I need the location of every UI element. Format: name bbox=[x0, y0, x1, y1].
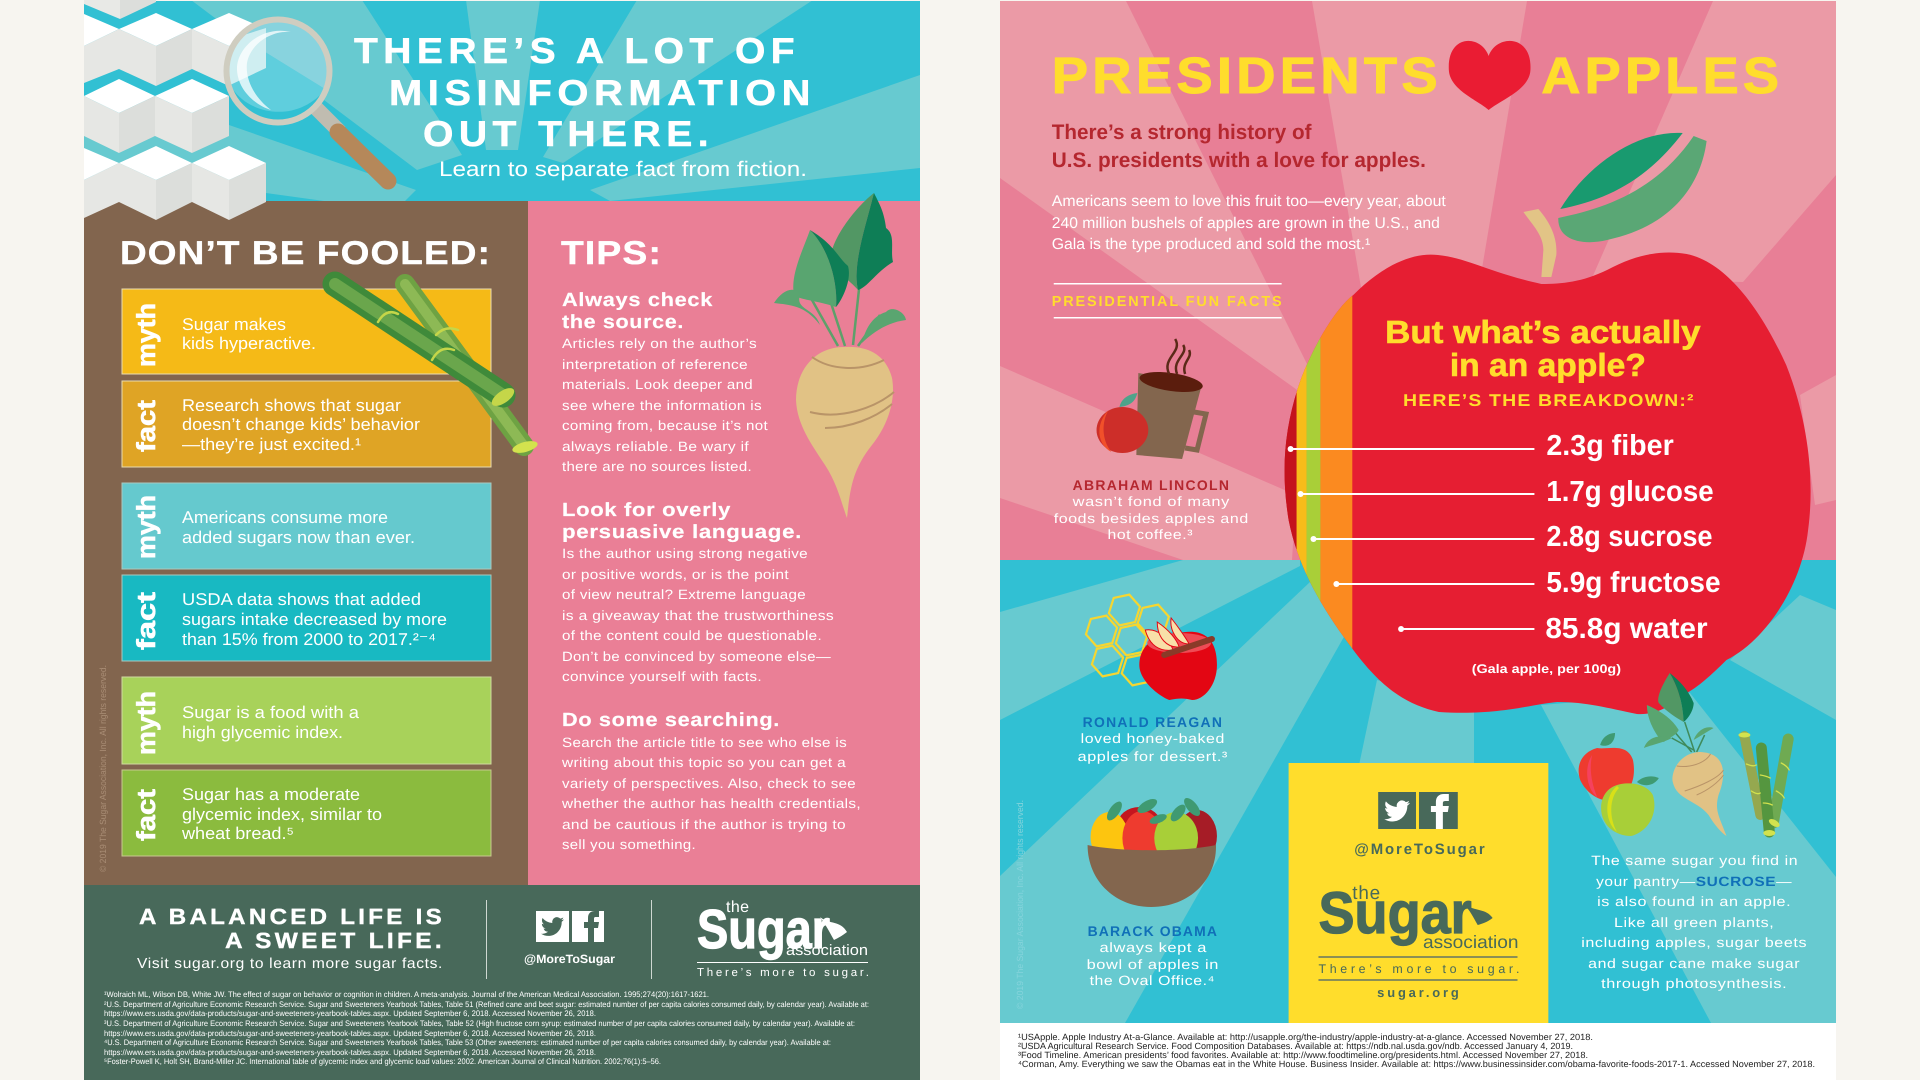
tip: persuasive language: Is the author using strong negative bbox=[562, 546, 808, 561]
balanced life message bbox=[137, 904, 445, 972]
myth card: added sugars: Americans consume more bbox=[182, 508, 388, 527]
heading: what's in an apple: HERE’S THE BREAKDOWN:² bbox=[1403, 391, 1695, 410]
references: ¹Wolraich ML, Wilson DB, White JW. The effect of sugar on behavior or cognition in children. A meta-analysis. Journal of the American Medical Association. 1995;274(20):1617-1621. bbox=[104, 990, 709, 999]
breakdown note: (Gala apple, per 100g) bbox=[1472, 662, 1621, 676]
references: https://www.ers.usda.gov/data-products/sugar-and-sweeteners-yearbook-tables.aspx. Updated September 6, 2018. Accessed November 26, 2018. bbox=[104, 1029, 596, 1038]
tip: do some searching: Search the article title to see who else is bbox=[562, 735, 847, 750]
references bbox=[1018, 1032, 1815, 1069]
cane bbox=[1738, 732, 1789, 836]
breakdown: water bbox=[1398, 613, 1708, 645]
references: https://www.ers.usda.gov/data-products/sugar-and-sweeteners-yearbook-tables.aspx. Updated September 6, 2018. Accessed November 26, 2018. bbox=[104, 1009, 596, 1018]
references: ⁴Corman, Amy. Everything we saw the Obamas eat in the White House. Business Insider. Available at: https://www.businessinsider.com/obama-favorite-foods-2017-1. Accessed November 27, 2018. bbox=[1018, 1059, 1815, 1069]
tip: persuasive language: or positive words, or is the point bbox=[562, 567, 789, 582]
tip: check the source: see where the information is bbox=[562, 398, 762, 413]
heading: what's in an apple bbox=[1385, 314, 1701, 410]
references: ³U.S. Department of Agriculture Economic Research Service. Sugar and Sweeteners Yearbook Tables, Table 52 (High fructose corn syrup: estimated number of per capita calories consumed daily, by calendar year). Available at: bbox=[104, 1019, 855, 1028]
panel: don't be fooled bbox=[84, 201, 528, 885]
tip: check the source: coming from, because it’s not bbox=[562, 418, 768, 433]
heading: misinformation: OUT THERE. bbox=[423, 113, 714, 154]
heading: don't be fooled: DON’T BE FOOLED: bbox=[120, 234, 491, 271]
apple nutrient bands bbox=[1279, 240, 1816, 730]
panel: tips bbox=[528, 201, 920, 885]
fact card: moderate glycemic index: wheat bread.⁵ bbox=[181, 824, 294, 843]
apples bbox=[1579, 733, 1659, 836]
references: ²U.S. Department of Agriculture Economic Research Service. Sugar and Sweeteners Yearbook Tables, Table 51 (Refined cane and beet sugar: estimated number of per capita calories consumed daily, by calendar year). Available at: bbox=[104, 1000, 869, 1009]
logo: the sugar association: Sugar bbox=[1318, 880, 1472, 946]
myth card: added sugars bbox=[122, 483, 491, 569]
intro text: U.S. presidents with a love for apples. bbox=[1052, 149, 1426, 172]
fact card: moderate glycemic index bbox=[122, 770, 491, 856]
heading: what's in an apple: But what’s actually bbox=[1385, 314, 1701, 350]
tip: persuasive language: of view neutral? Extreme language bbox=[562, 587, 806, 602]
tip: persuasive language: is a giveaway that the trustworthiness bbox=[562, 608, 834, 623]
references: ¹USApple. Apple Industry At-a-Glance. Available at: http://usapple.org/the-industry/apple-industry-at-a-glance. Accessed November 27, 2018. bbox=[1018, 1032, 1593, 1042]
heading: misinformation: Learn to separate fact from fiction. bbox=[439, 158, 807, 181]
title: presidents love apples: PRESIDENTS bbox=[1052, 47, 1442, 104]
text: sucrose note: and sugar cane make sugar bbox=[1588, 956, 1800, 971]
tip: do some searching: and be cautious if the author is trying to bbox=[562, 817, 846, 832]
breakdown: sucrose bbox=[1311, 521, 1713, 553]
fact card: USDA data: USDA data shows that added bbox=[182, 590, 421, 609]
fact card: behaviour: fact bbox=[131, 400, 161, 452]
heading: presidential fun facts: PRESIDENTIAL FUN FACTS bbox=[1052, 294, 1282, 310]
tip: check the source: always reliable. Be wary if bbox=[562, 439, 749, 454]
myth card: hyperactive: Sugar makes bbox=[182, 315, 286, 334]
fact: Abraham Lincoln: hot coffee.³ bbox=[1107, 527, 1193, 542]
icon: coffee mug and apple bbox=[1097, 339, 1206, 459]
fact: Ronald Reagan: RONALD REAGAN bbox=[1083, 714, 1222, 730]
breakdown: fiber bbox=[1288, 430, 1674, 462]
logo: the sugar association bbox=[1318, 880, 1519, 1000]
text: sucrose note: through photosynthesis. bbox=[1601, 976, 1787, 991]
heading: misinformation: THERE’S A LOT OF bbox=[354, 30, 800, 71]
text: sucrose note: including apples, sugar beets bbox=[1581, 935, 1807, 950]
fact: Abraham Lincoln: wasn’t fond of many bbox=[1071, 494, 1230, 509]
title: presidents love apples: APPLES bbox=[1541, 47, 1783, 104]
heading: what's in an apple: in an apple? bbox=[1450, 347, 1646, 383]
tip: persuasive language: persuasive language. bbox=[562, 522, 802, 543]
intro text bbox=[1052, 121, 1447, 253]
fact: Ronald Reagan: apples for dessert.³ bbox=[1078, 749, 1228, 764]
fact card: USDA data: fact bbox=[131, 592, 161, 650]
tip: check the source: interpretation of reference bbox=[562, 357, 748, 372]
fact card: behaviour bbox=[122, 381, 491, 467]
icon: sugar cubes bbox=[84, 0, 266, 220]
balanced life message: A SWEET LIFE. bbox=[225, 928, 445, 953]
panel: yellow logo card bbox=[1289, 763, 1548, 1023]
fact card: USDA data bbox=[122, 575, 491, 661]
logo: the sugar association: Sugar bbox=[697, 898, 830, 960]
breakdown: glucose bbox=[1298, 476, 1714, 508]
fact card: USDA data: than 15% from 2000 to 2017.²⁻⁴ bbox=[182, 630, 436, 649]
icon: sugar beet bbox=[774, 193, 906, 518]
heading: misinformation bbox=[354, 30, 816, 181]
icon: sugar cane bbox=[335, 284, 539, 455]
breakdown: glucose: 1.7g glucose bbox=[1546, 476, 1714, 508]
breakdown: sucrose: 2.8g sucrose bbox=[1546, 521, 1713, 553]
tip: do some searching: whether the author has health credentials, bbox=[561, 796, 861, 811]
tip: do some searching: writing about this topic so you can get a bbox=[561, 755, 846, 770]
tip: check the source: materials. Look deeper and bbox=[562, 377, 753, 392]
references: ⁴U.S. Department of Agriculture Economic Research Service. Sugar and Sweeteners Yearbook Tables, Table 53 (Other sweeteners: estimated number of per capita calories consumed daily, by calendar year). Available at: bbox=[104, 1038, 831, 1047]
fact: Ronald Reagan: loved honey-baked bbox=[1081, 731, 1225, 746]
icon: honey and baked apple bbox=[1083, 593, 1217, 700]
panel: right poster background bbox=[1000, 1, 1836, 1080]
beet bbox=[1644, 673, 1726, 836]
myth card: added sugars: myth bbox=[131, 495, 161, 559]
tip: check the source: there are no sources listed. bbox=[562, 459, 752, 474]
fact: Barack Obama: BARACK OBAMA bbox=[1088, 923, 1217, 939]
fact card: USDA data: sugars intake decreased by more bbox=[182, 610, 447, 629]
fact: Ronald Reagan bbox=[1078, 714, 1228, 764]
tip: do some searching: variety of perspectives. Also, check to see bbox=[562, 776, 856, 791]
myth card: hyperactive: kids hyperactive. bbox=[182, 334, 316, 353]
icon: heart bbox=[1449, 41, 1531, 110]
breakdown: fiber: 2.3g fiber bbox=[1546, 430, 1674, 462]
fact: Barack Obama: bowl of apples in bbox=[1087, 957, 1219, 972]
myth card: added sugars: added sugars now than ever. bbox=[182, 528, 415, 547]
heading: tips: TIPS: bbox=[561, 234, 662, 271]
tip: persuasive language: Don’t be convinced by someone else— bbox=[562, 649, 831, 664]
title: presidents love apples bbox=[1052, 41, 1783, 110]
social icons bbox=[524, 911, 615, 966]
myth card: glycemic index bbox=[122, 677, 491, 764]
logo: the sugar association: the bbox=[1352, 883, 1380, 904]
tip: persuasive language: convince yourself with facts. bbox=[562, 669, 762, 684]
right poster content bbox=[1015, 41, 1816, 1023]
icon: bowl of apples bbox=[1088, 795, 1217, 907]
references: ⁵Foster-Powell K, Holt SH, Brand-Miller JC. International table of glycemic index and glycemic load values: 2002. American Journal of Clinical Nutrition. 2002;76(1):5–56. bbox=[104, 1057, 661, 1066]
tip: check the source: Articles rely on the author’s bbox=[562, 336, 757, 351]
heading: misinformation: MISINFORMATION bbox=[389, 72, 816, 113]
intro text: There’s a strong history of bbox=[1052, 121, 1312, 144]
tip: persuasive language: of the content could be questionable. bbox=[562, 628, 822, 643]
fact: Barack Obama: the Oval Office.⁴ bbox=[1090, 973, 1215, 988]
breakdown: fructose: 5.9g fructose bbox=[1546, 567, 1721, 599]
references: https://www.ers.usda.gov/data-products/sugar-and-sweeteners-yearbook-tables.aspx. Updated September 6, 2018. Accessed November 26, 2018. bbox=[104, 1048, 596, 1057]
logo: the sugar association: association bbox=[1423, 932, 1518, 952]
tip: do some searching bbox=[561, 710, 861, 852]
panel: left footer bbox=[84, 885, 920, 1080]
myth card: glycemic index: myth bbox=[131, 691, 161, 755]
fact card: behaviour: Research shows that sugar bbox=[182, 396, 401, 415]
tip: check the source bbox=[562, 290, 768, 474]
icon: magnifying glass bbox=[225, 20, 388, 181]
text: sucrose note: is also found in an apple. bbox=[1597, 894, 1791, 909]
text: sucrose note bbox=[1581, 853, 1807, 991]
icon: apples, beet and cane bbox=[1579, 673, 1789, 836]
fact card: behaviour: doesn’t change kids’ behavior bbox=[182, 415, 420, 434]
fact: Barack Obama: always kept a bbox=[1100, 940, 1207, 955]
tip: check the source: the source. bbox=[562, 312, 684, 333]
fact card: moderate glycemic index: Sugar has a moderate bbox=[182, 785, 360, 804]
tip: check the source: Always check bbox=[562, 290, 713, 311]
logo: the sugar association: There’s more to sugar. bbox=[1318, 962, 1519, 976]
social icons: @MoreToSugar bbox=[524, 952, 615, 966]
text: sucrose note: your pantry— SUCROSE — bbox=[1596, 874, 1792, 889]
references bbox=[104, 990, 869, 1066]
icon: apple stem and leaf bbox=[1523, 133, 1707, 277]
social icons bbox=[1378, 792, 1458, 829]
myth card: hyperactive bbox=[122, 289, 491, 374]
panel: apple breakdown bbox=[1279, 133, 1816, 730]
balanced life message: Visit sugar.org to learn more sugar facts. bbox=[137, 956, 443, 972]
copyright note: © 2019 The Sugar Association, Inc. All rights reserved. bbox=[98, 665, 108, 872]
fact: Abraham Lincoln: ABRAHAM LINCOLN bbox=[1073, 477, 1229, 493]
fact card: moderate glycemic index: fact bbox=[131, 789, 161, 841]
tip: do some searching: Do some searching. bbox=[562, 710, 780, 731]
intro text: Americans seem to love this fruit too—every year, about bbox=[1052, 193, 1447, 210]
breakdown: fructose bbox=[1333, 567, 1721, 599]
fact: Abraham Lincoln: foods besides apples and bbox=[1054, 511, 1249, 526]
panel: left poster header bbox=[84, 0, 920, 201]
logo: the sugar association: the bbox=[726, 899, 749, 916]
tip: persuasive language: Look for overly bbox=[562, 500, 731, 521]
logo: the sugar association: association bbox=[786, 942, 868, 959]
copyright note: © 2019 The Sugar Association, Inc. All rights reserved. bbox=[1015, 800, 1025, 1009]
myth card: glycemic index: high glycemic index. bbox=[182, 723, 343, 742]
fact: Abraham Lincoln bbox=[1054, 477, 1249, 542]
myth card: hyperactive: myth bbox=[131, 303, 161, 367]
handle: @MoreToSugar bbox=[1354, 841, 1485, 858]
text: sucrose note: Like all green plants, bbox=[1614, 915, 1774, 930]
references: ³Food Timeline. American presidents’ food favorites. Available at: http://www.foodtimeline.org/presidents.html. Accessed November 27, 2018. bbox=[1018, 1050, 1588, 1060]
intro text: Gala is the type produced and sold the most.¹ bbox=[1052, 236, 1370, 253]
tip: persuasive language bbox=[562, 500, 834, 684]
fact card: moderate glycemic index: glycemic index, similar to bbox=[182, 805, 382, 824]
tip: do some searching: sell you something. bbox=[562, 837, 696, 852]
fact card: behaviour: —they’re just excited.¹ bbox=[182, 435, 361, 454]
myth card: glycemic index: Sugar is a food with a bbox=[182, 703, 360, 722]
text: sucrose note: The same sugar you find in bbox=[1591, 853, 1798, 868]
references: ²USDA Agricultural Research Service. Food Composition Databases. Available at: https://ndb.nal.usda.gov/ndb. Accessed January 4, 2019. bbox=[1018, 1041, 1573, 1051]
breakdown: water: 85.8g water bbox=[1545, 613, 1708, 645]
logo: the sugar association bbox=[697, 898, 869, 979]
balanced life message: A BALANCED LIFE IS bbox=[139, 904, 445, 929]
logo: the sugar association: sugar.org bbox=[1377, 985, 1459, 1000]
fact: Barack Obama bbox=[1087, 923, 1219, 988]
logo: the sugar association: There’s more to sugar. bbox=[697, 967, 869, 979]
intro text: 240 million bushels of apples are grown in the U.S., and bbox=[1052, 215, 1440, 232]
